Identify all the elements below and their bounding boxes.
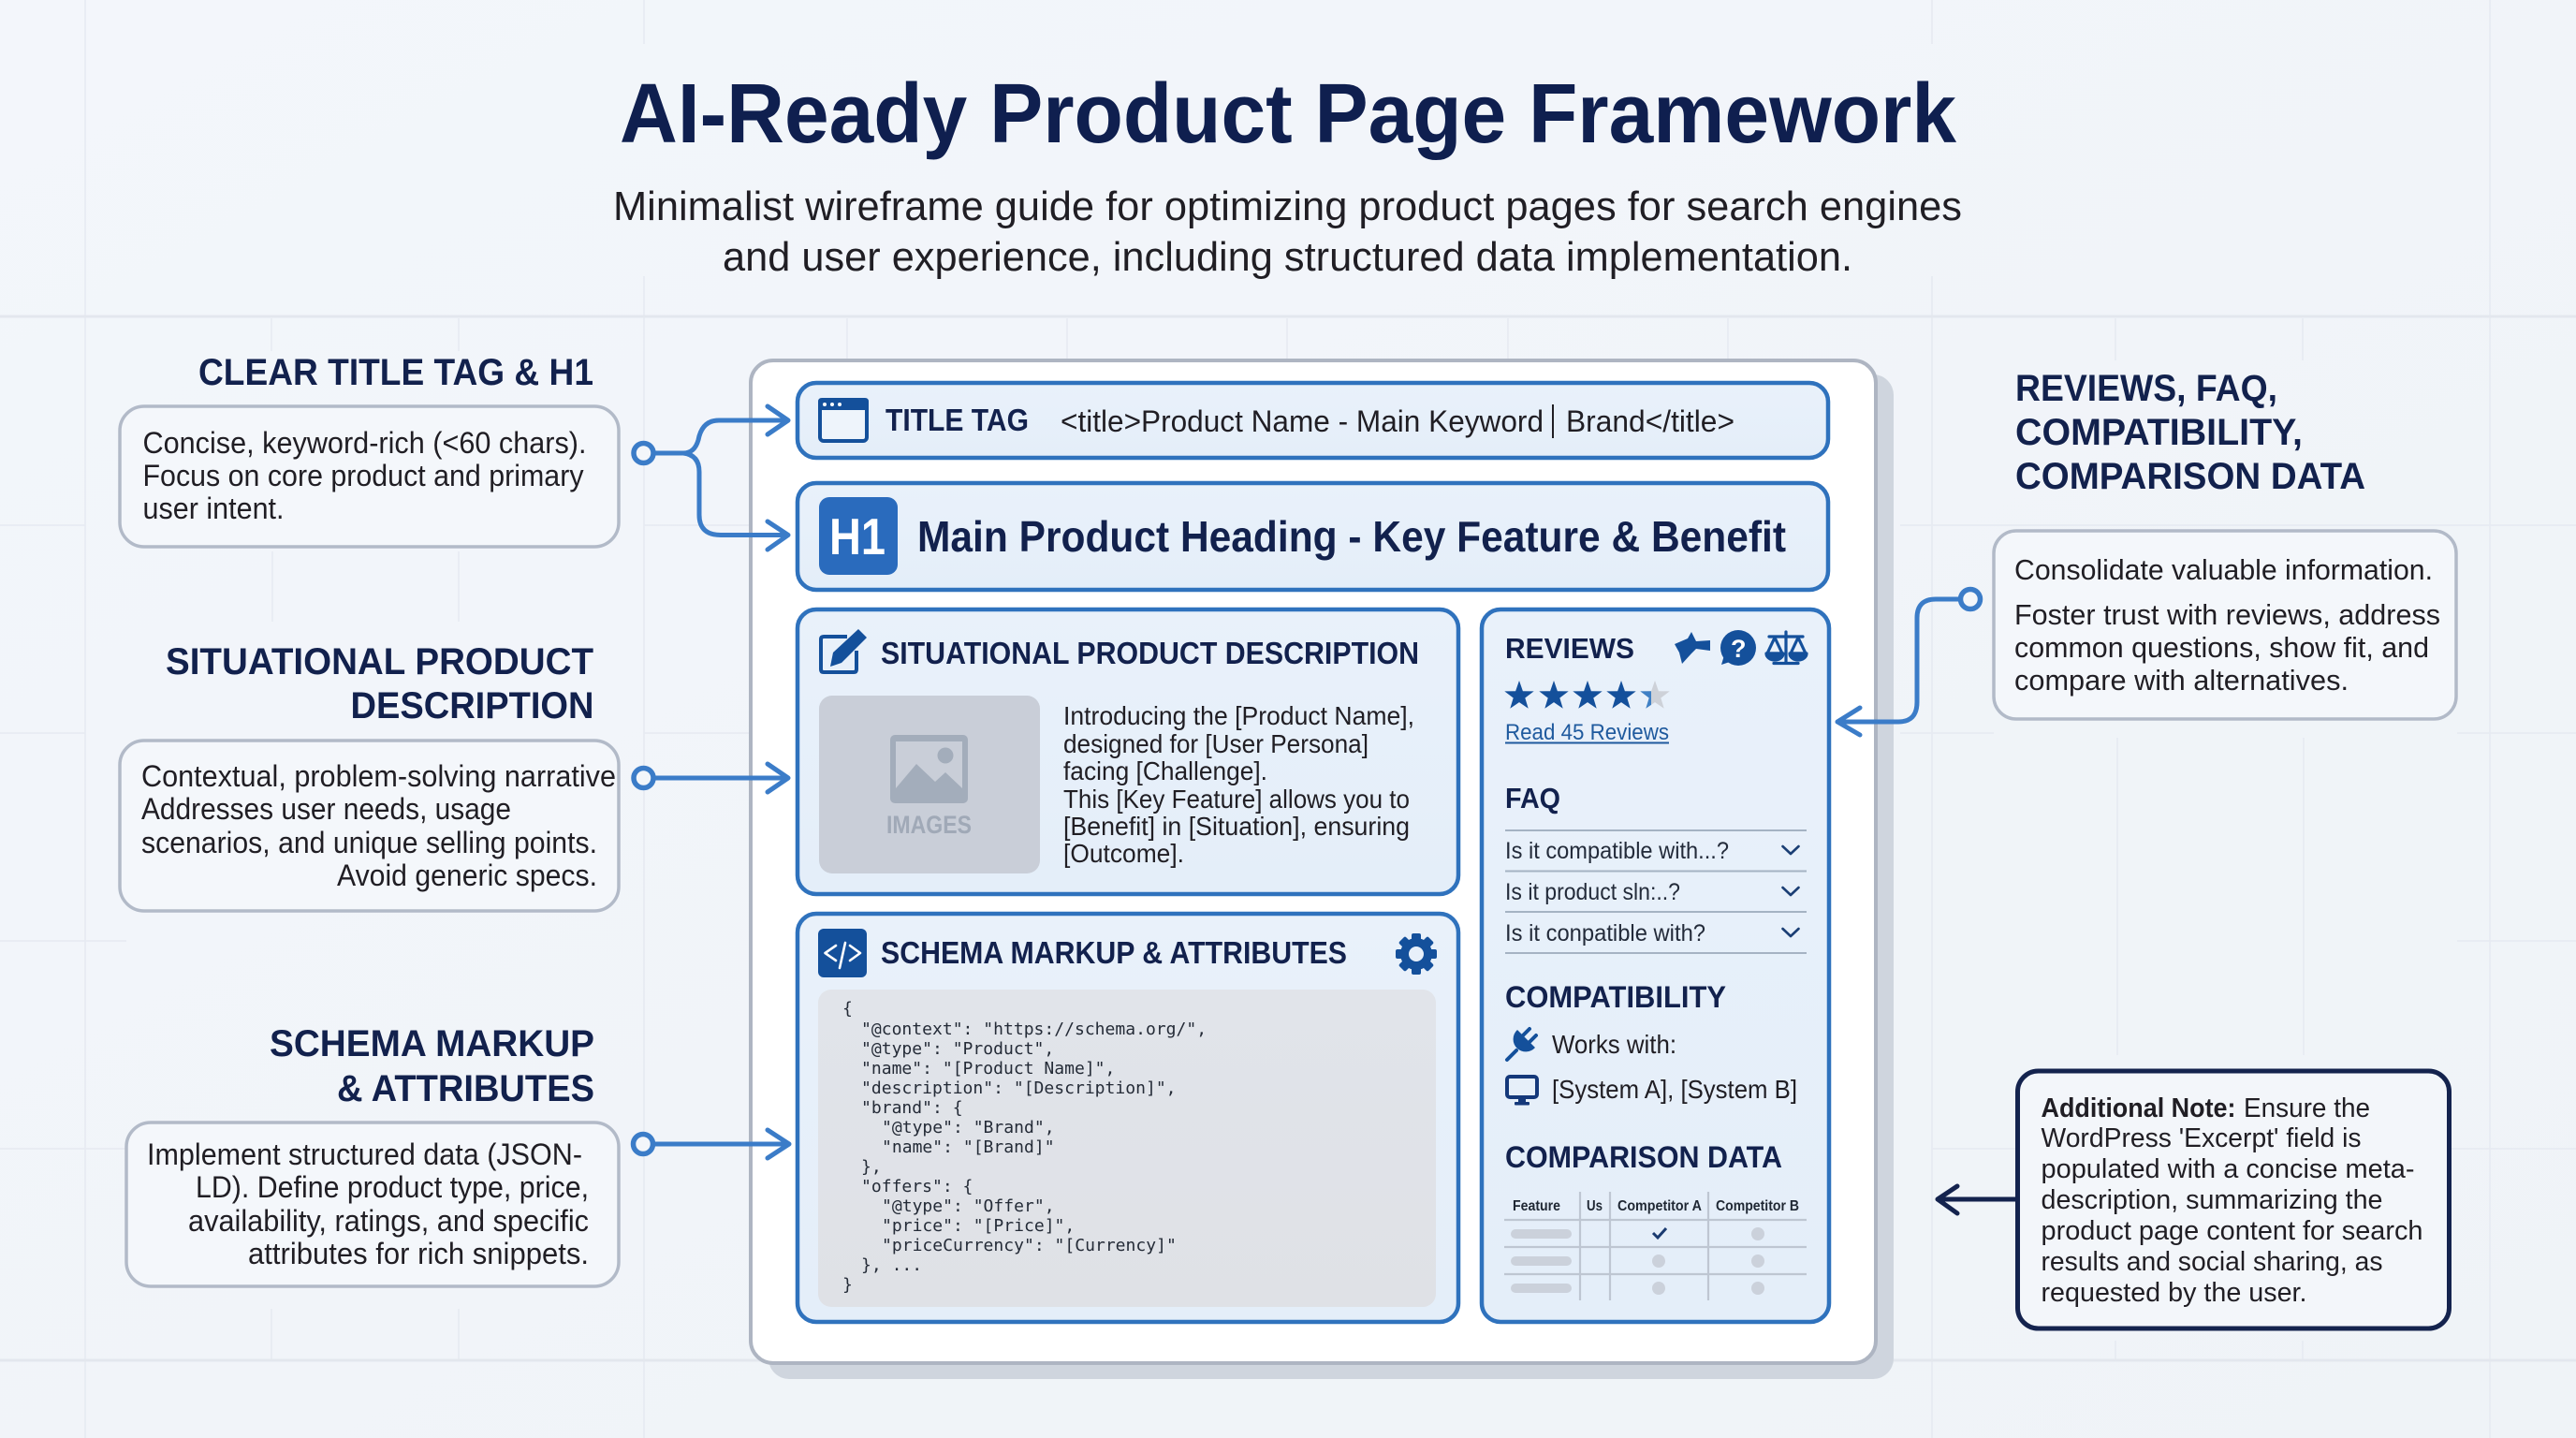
additional note callout bbox=[1938, 1071, 2449, 1328]
description copy: [Benefit] in [Situation], ensuring bbox=[1063, 812, 1410, 841]
text box: description guidance: Contextual, problem-solving narrative bbox=[141, 759, 616, 793]
image placeholder: IMAGES bbox=[886, 811, 972, 839]
compatibility line: works with: Works with: bbox=[1552, 1030, 1676, 1059]
heading: reviews: REVIEWS bbox=[1505, 632, 1634, 665]
text box: schema guidance: Implement structured data (JSON- bbox=[147, 1137, 582, 1171]
heading: situational description: SITUATIONAL PRODUCT bbox=[166, 641, 593, 682]
connector: schema arrow bbox=[633, 1130, 789, 1158]
title: AI-Ready Product Page Framework bbox=[620, 67, 1957, 161]
title tag example: <title>Product Name - Main Keyword bbox=[1061, 404, 1544, 438]
code block: JSON-LD: "@type": "Brand", bbox=[882, 1118, 1055, 1137]
comparison table: Competitor A bbox=[1617, 1198, 1702, 1214]
compatibility line: systems: [System A], [System B] bbox=[1552, 1075, 1797, 1104]
description copy: facing [Challenge]. bbox=[1063, 756, 1267, 785]
note box: product page content for search bbox=[2041, 1216, 2422, 1246]
text box: consolidated info guidance: common questions, show fit, and bbox=[2014, 631, 2429, 664]
note box bbox=[2018, 1071, 2449, 1328]
subtitle: and user experience, including structured data implementation. bbox=[723, 234, 1852, 280]
text box: schema guidance: attributes for rich snippets. bbox=[248, 1237, 589, 1270]
heading: schema markup: SCHEMA MARKUP bbox=[270, 1023, 594, 1064]
heading: compatibility: COMPATIBILITY bbox=[1505, 980, 1726, 1014]
FAQ list: Is it compatible with...? bbox=[1505, 838, 1729, 864]
code block: JSON-LD: "name": "[Brand]" bbox=[882, 1137, 1055, 1157]
text box: description guidance: scenarios, and unique selling points. bbox=[141, 826, 597, 859]
wireframe card shadow bbox=[768, 374, 1894, 1379]
title tag example: Brand</title> bbox=[1566, 404, 1734, 438]
description copy: [Outcome]. bbox=[1063, 839, 1184, 868]
code block: JSON-LD: "offers": { bbox=[861, 1177, 973, 1196]
main product heading: Main Product Heading - Key Feature & Benefit bbox=[917, 512, 1786, 561]
connector: description arrow bbox=[634, 764, 788, 792]
panel: reviews, FAQ, compatibility, comparison bbox=[1482, 609, 1829, 1322]
text box: title tag guidance: Focus on core product and primary bbox=[142, 459, 584, 492]
icon: review badge bbox=[1675, 632, 1710, 664]
code block: JSON-LD: "description": "[Description]", bbox=[861, 1078, 1177, 1098]
code block: JSON-LD: { bbox=[842, 999, 853, 1019]
image placeholder bbox=[819, 696, 1040, 873]
code block: JSON-LD: }, ... bbox=[861, 1255, 922, 1275]
comparison table: Feature bbox=[1513, 1198, 1560, 1214]
icon: gear bbox=[1396, 933, 1437, 975]
FAQ list: Is it product sln:..? bbox=[1505, 879, 1680, 905]
code block: JSON-LD: "@type": "Offer", bbox=[882, 1196, 1055, 1216]
heading: reviews FAQ compatibility: REVIEWS, FAQ, bbox=[2015, 368, 2277, 409]
note box: Additional Note: bbox=[2041, 1093, 2235, 1123]
note box: requested by the user. bbox=[2041, 1278, 2306, 1308]
icon: question bubble bbox=[1720, 630, 1756, 666]
text box: title tag guidance: Concise, keyword-rich (<60 chars). bbox=[142, 426, 586, 460]
text box: title tag guidance bbox=[120, 406, 619, 547]
star rating bbox=[1504, 681, 1670, 709]
connector: reviews arrow bbox=[1837, 590, 1981, 735]
panel: situational product description bbox=[798, 609, 1458, 894]
note box: populated with a concise meta- bbox=[2041, 1154, 2415, 1184]
text box: consolidated info guidance bbox=[1994, 531, 2456, 719]
code block: JSON-LD: }, bbox=[861, 1157, 882, 1177]
note box: WordPress 'Excerpt' field is bbox=[2041, 1123, 2361, 1153]
icon: H1 badge: H1 bbox=[829, 507, 886, 565]
subtitle bbox=[613, 183, 1962, 280]
connector: title tag and H1 arrows bbox=[634, 406, 788, 550]
heading: schema markup: SCHEMA MARKUP & ATTRIBUTES bbox=[881, 935, 1347, 970]
comparison table: Us bbox=[1587, 1198, 1603, 1214]
code block: JSON-LD: "@type": "Product", bbox=[861, 1039, 1054, 1059]
right callout: reviews, FAQ, compatibility bbox=[1994, 368, 2456, 719]
code block: JSON-LD: "@context": "https://schema.org/", bbox=[861, 1020, 1207, 1039]
icon: browser window bbox=[818, 398, 869, 441]
icon: question bubble: ? bbox=[1731, 635, 1747, 663]
text box: description guidance: Avoid generic specs. bbox=[337, 858, 597, 892]
text box: description guidance: Addresses user needs, usage bbox=[141, 792, 511, 826]
panel: schema markup and attributes bbox=[798, 914, 1458, 1322]
arrow: note pointer bbox=[1938, 1186, 2017, 1213]
heading: reviews FAQ compatibility: COMPARISON DATA bbox=[2015, 456, 2365, 497]
code block: JSON-LD: "price": "[Price]", bbox=[882, 1216, 1075, 1236]
heading: comparison data: COMPARISON DATA bbox=[1505, 1140, 1782, 1174]
heading: schema markup bbox=[270, 1023, 594, 1109]
heading: reviews FAQ compatibility: COMPATIBILITY, bbox=[2015, 412, 2303, 453]
note box: Ensure the bbox=[2244, 1093, 2370, 1123]
heading: situational description bbox=[166, 641, 593, 726]
text box: consolidated info guidance: Foster trust with reviews, address bbox=[2014, 598, 2440, 631]
link: read reviews: Read 45 Reviews bbox=[1505, 720, 1669, 745]
icon: balance scales bbox=[1766, 632, 1807, 663]
wireframe card bbox=[751, 360, 1876, 1363]
text box: consolidated info guidance: Consolidate valuable information. bbox=[2014, 553, 2433, 586]
icon: plug bbox=[1507, 1029, 1536, 1060]
heading: situational description: SITUATIONAL PRODUCT DESCRIPTION bbox=[881, 636, 1419, 670]
description copy: Introducing the [Product Name], bbox=[1063, 701, 1414, 730]
panel: H1 bar bbox=[798, 483, 1828, 590]
text box: schema guidance bbox=[126, 1123, 619, 1286]
heading: clear title tag: CLEAR TITLE TAG & H1 bbox=[198, 352, 593, 393]
left callout: situational product description bbox=[120, 641, 619, 911]
code block: JSON-LD: } bbox=[842, 1275, 853, 1295]
text box: title tag guidance: user intent. bbox=[142, 492, 285, 525]
description copy bbox=[1063, 701, 1414, 868]
left callout: clear title tag and H1 bbox=[120, 352, 619, 547]
FAQ list: Is it conpatible with? bbox=[1505, 920, 1705, 946]
text box: schema guidance: LD). Define product type, price, bbox=[196, 1170, 589, 1204]
note box: results and social sharing, as bbox=[2041, 1247, 2383, 1277]
left callout: schema markup bbox=[126, 1023, 619, 1286]
code block: JSON-LD: "brand": { bbox=[861, 1098, 963, 1118]
label: title tag: TITLE TAG bbox=[886, 403, 1029, 437]
panel: title tag bar bbox=[798, 383, 1828, 458]
note box: description, summarizing the bbox=[2041, 1185, 2383, 1215]
description copy: This [Key Feature] allows you to bbox=[1063, 785, 1410, 814]
icon: H1 badge bbox=[819, 497, 898, 575]
FAQ list bbox=[1505, 830, 1807, 953]
text box: consolidated info guidance: compare with alternatives. bbox=[2014, 664, 2349, 697]
icon: monitor bbox=[1507, 1077, 1537, 1105]
comparison table bbox=[1504, 1192, 1807, 1300]
icon: edit pencil bbox=[821, 629, 867, 672]
heading: reviews FAQ compatibility bbox=[2015, 368, 2365, 497]
icon: code brackets bbox=[818, 929, 867, 977]
heading: schema markup: & ATTRIBUTES bbox=[337, 1068, 594, 1109]
code block: JSON-LD bbox=[818, 990, 1436, 1307]
comparison table: Competitor B bbox=[1716, 1198, 1799, 1214]
text box: schema guidance: availability, ratings, and specific bbox=[188, 1204, 589, 1238]
description copy: designed for [User Persona] bbox=[1063, 729, 1368, 758]
code block: JSON-LD: "name": "[Product Name]", bbox=[861, 1059, 1115, 1078]
code block: JSON-LD: "priceCurrency": "[Currency]" bbox=[882, 1236, 1177, 1255]
subtitle: Minimalist wireframe guide for optimizing product pages for search engines bbox=[613, 183, 1962, 229]
heading: situational description: DESCRIPTION bbox=[350, 685, 593, 726]
heading: FAQ: FAQ bbox=[1505, 782, 1560, 814]
text box: description guidance bbox=[120, 741, 619, 911]
